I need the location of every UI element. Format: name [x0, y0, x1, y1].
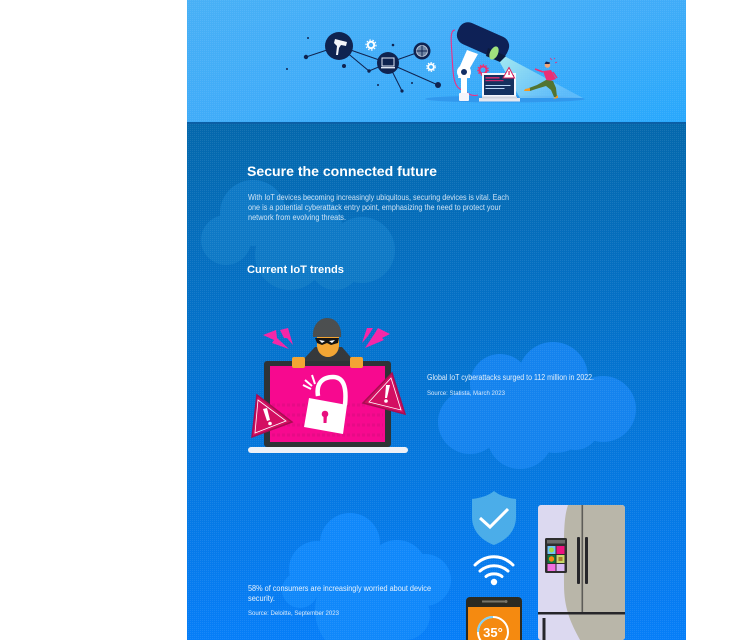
panel: hero banner [187, 0, 686, 123]
icon: laptop with warning [478, 65, 520, 102]
text block: intro: network from evolving threats. [248, 213, 346, 222]
icon: lightning right [362, 328, 390, 348]
heading: Secure the connected future: Secure the connected future [247, 163, 437, 179]
cloud: behind attack stat [438, 342, 636, 469]
text block: intro [248, 193, 509, 222]
icon: warning triangle right [363, 373, 405, 414]
cloud: behind intro [201, 180, 395, 290]
icon: smart fridge [538, 505, 625, 640]
icon: open padlock [303, 375, 347, 434]
text block: attack stat: Source: Statista, March 2023 [427, 390, 505, 397]
icon: gear right [427, 63, 435, 71]
heading: Current IoT trends: Current IoT trends [247, 264, 344, 276]
laptop [248, 357, 408, 453]
icon: shield with check [472, 491, 516, 545]
text block: consumer stat: Source: Deloitte, September 2023 [248, 610, 339, 617]
network diagram [286, 32, 441, 93]
icon: laptop node [377, 52, 399, 74]
fridge tablet [545, 538, 567, 573]
text block: attack stat [427, 373, 594, 397]
text block: attack stat: Global IoT cyberattacks surged to 112 million in 2022. [427, 373, 594, 382]
hacker figure [302, 318, 354, 361]
cloud: behind consumer stat [282, 513, 451, 640]
icon: phone thermostat: 35° [483, 625, 503, 640]
icon: camera node [325, 32, 353, 60]
icon: lightning left [263, 328, 293, 349]
icon: globe node [414, 42, 430, 60]
icon: wifi [475, 557, 513, 584]
icon: running person [524, 58, 558, 99]
panel: main content [187, 122, 686, 640]
text block: intro: With IoT devices becoming increasingly ubiquitous, securing devices is vital. Each [248, 193, 509, 202]
icon: security camera [451, 19, 583, 101]
text block: consumer stat: 58% of consumers are increasingly worried about device [248, 584, 432, 593]
text block: intro: one is a potential cyberattack entry point, emphasizing the need to protect your [248, 203, 501, 212]
icon: gear left [366, 40, 376, 50]
ground shadow [425, 96, 585, 102]
text block: consumer stat: security. [248, 594, 275, 603]
icon: phone thermostat [466, 597, 522, 640]
icon: warning triangle left [252, 395, 292, 437]
illustration: hacker and laptop [248, 318, 408, 453]
text block: consumer stat [248, 584, 432, 617]
